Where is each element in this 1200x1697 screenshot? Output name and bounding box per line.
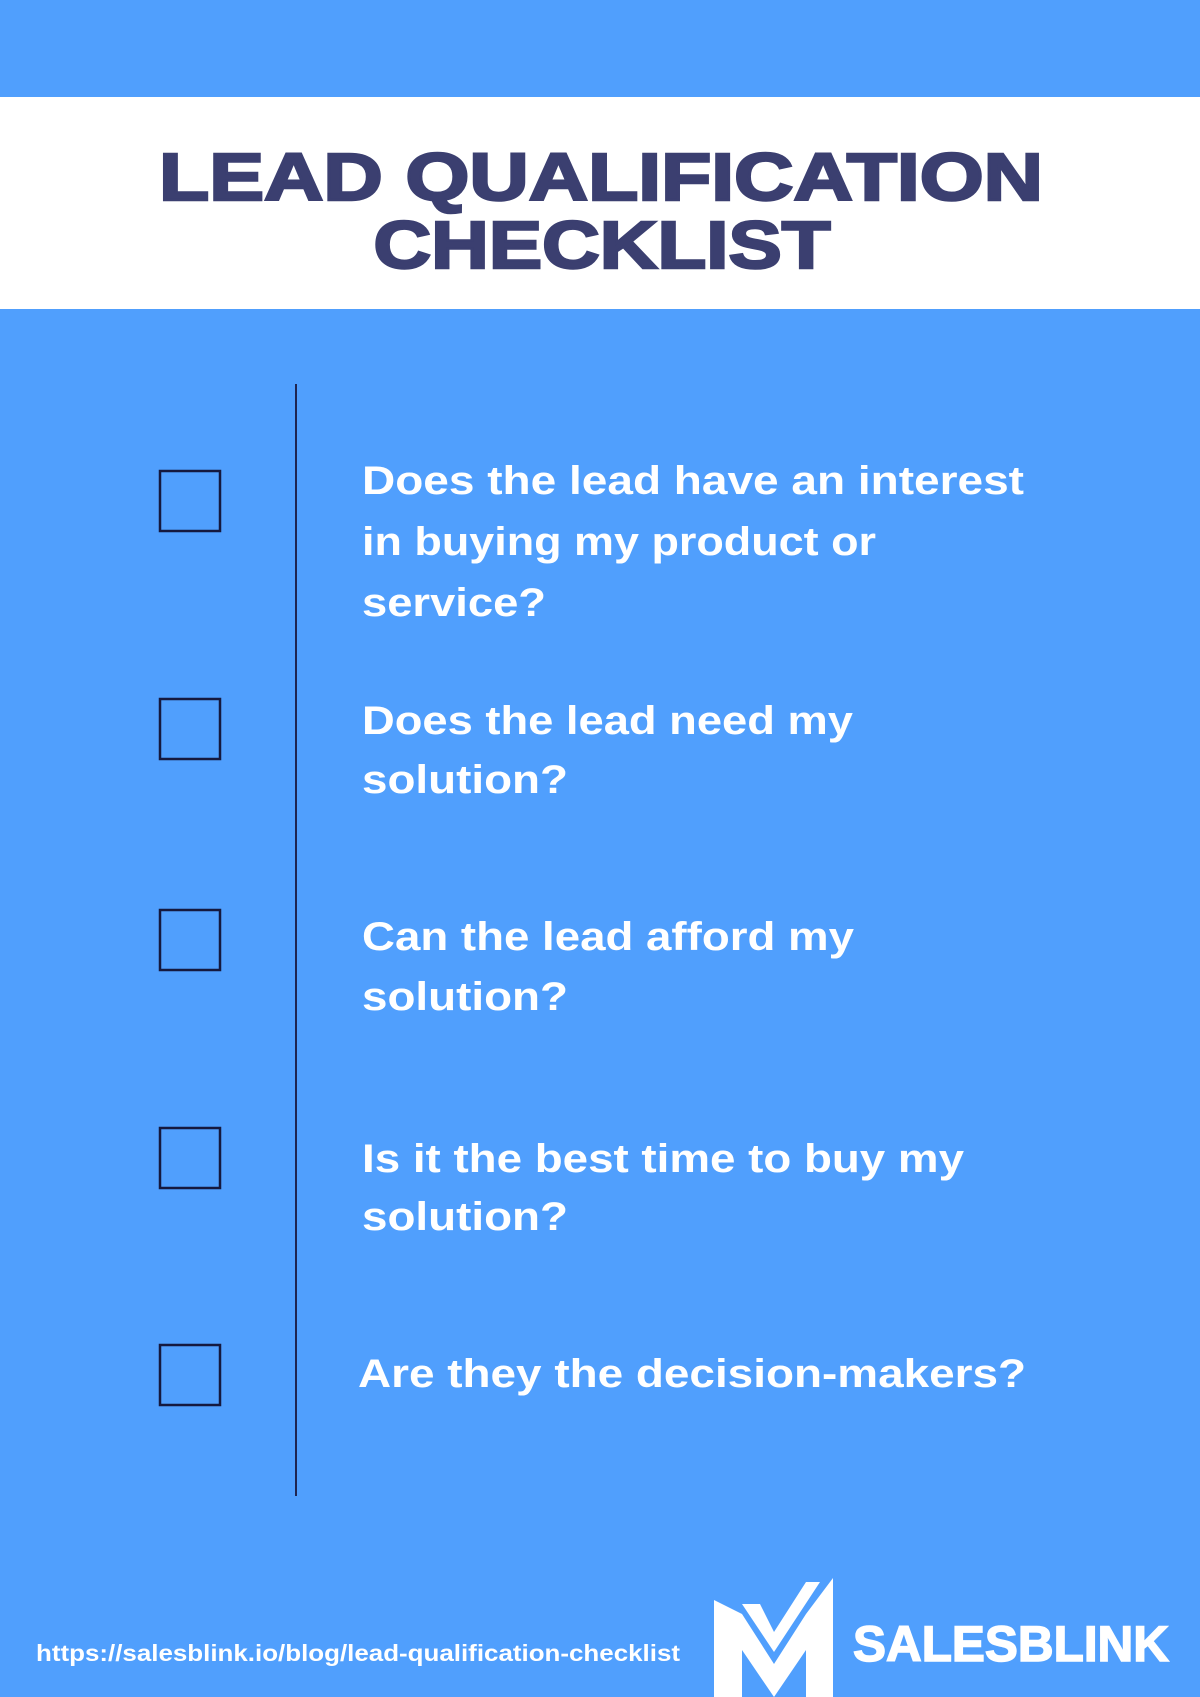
checkbox 3 (160, 910, 220, 970)
checkbox 5 (160, 1345, 220, 1405)
checkbox 4 (160, 1128, 220, 1188)
item 1 text: Does the lead have an interest (362, 459, 1024, 503)
item 5 text: Are they the decision-makers? (358, 1352, 1026, 1396)
item 4 text: solution? (362, 1195, 568, 1239)
item 1 text: service? (362, 581, 546, 625)
item 3 text: solution? (362, 975, 568, 1019)
title: LEAD QUALIFICATION (159, 140, 1043, 215)
item 1 text (362, 459, 1024, 625)
item 4 text: Is it the best time to buy my (362, 1137, 965, 1181)
item 4 text (362, 1137, 965, 1239)
item 3 text (362, 915, 855, 1019)
title: CHECKLIST (374, 208, 831, 283)
item 2 text: Does the lead need my (362, 699, 854, 743)
item 2 text: solution? (362, 758, 568, 802)
checklist (160, 459, 1026, 1405)
logo (714, 1578, 1169, 1697)
item 1 text: in buying my product or (362, 520, 876, 564)
header band (0, 97, 1200, 309)
checkbox 2 (160, 699, 220, 759)
icon: M check (714, 1578, 833, 1697)
checkbox 1 (160, 471, 220, 531)
brand name: SALESBLINK (853, 1616, 1169, 1672)
vertical divider line (295, 384, 297, 1496)
item 3 text: Can the lead afford my (362, 915, 855, 959)
item 2 text (362, 699, 854, 802)
footer url: https://salesblink.io/blog/lead-qualification-checklist (36, 1640, 680, 1666)
title (159, 140, 1043, 283)
